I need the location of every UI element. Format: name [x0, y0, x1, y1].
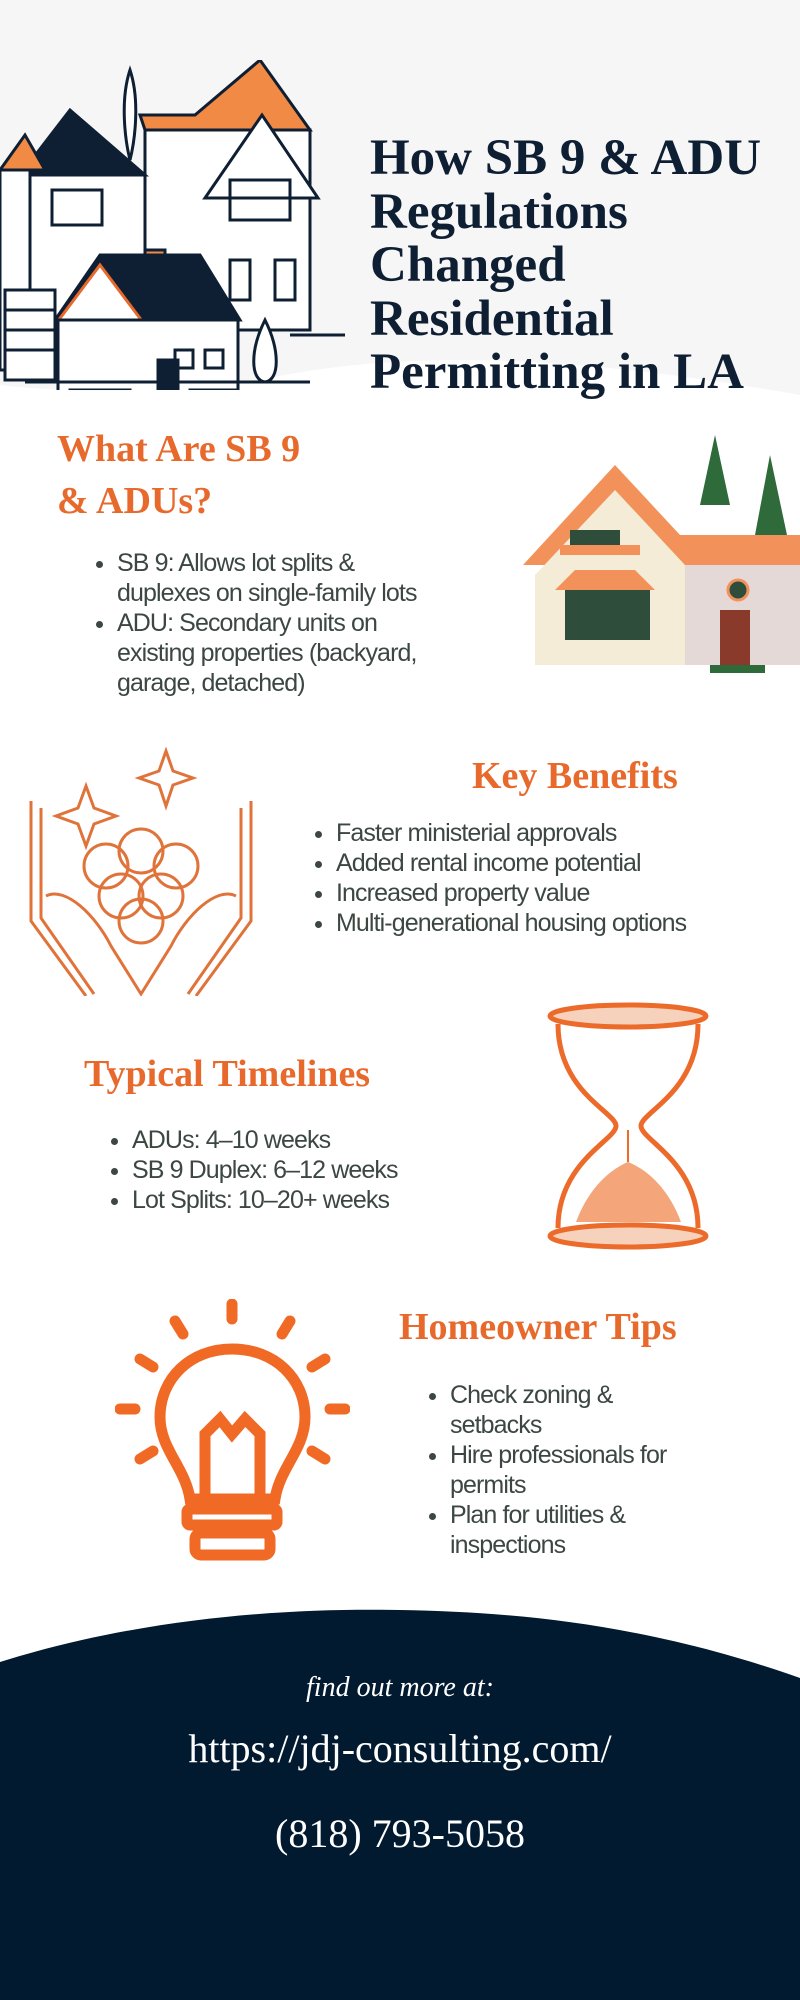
- text: website url: https://jdj-consulting.com/: [188, 1726, 612, 1771]
- title: Permitting in LA: [370, 344, 744, 400]
- bullet list: definitions: SB 9: Allows lot splits &: [117, 549, 354, 577]
- panel: typical timelines: [84, 1053, 398, 1214]
- icon: hands holding: [30, 746, 252, 996]
- heading: Homeowner Tips: Homeowner Tips: [399, 1306, 677, 1348]
- bullet list: benefits: Multi-generational housing options: [336, 909, 686, 937]
- bullet list: timelines: SB 9 Duplex: 6–12 weeks: [132, 1156, 398, 1184]
- icon: hourglass: [548, 1002, 708, 1250]
- bullet list: tips: Check zoning &: [450, 1381, 612, 1409]
- heading: What Are SB 9 & ADUs?: What Are SB 9: [57, 428, 300, 470]
- bullet list: definitions: duplexes on single-family lots: [117, 579, 417, 607]
- bullet list: tips: Hire professionals for: [450, 1441, 666, 1469]
- title: [370, 130, 761, 400]
- bullet list: tips: [429, 1381, 667, 1559]
- bullet list: benefits: [315, 819, 686, 937]
- bullet list: benefits: Faster ministerial approvals: [336, 819, 616, 847]
- panel: key benefits: [315, 755, 686, 937]
- heading: Key Benefits: Key Benefits: [472, 755, 678, 797]
- text: find out more at: find out more at:: [306, 1672, 494, 1703]
- heading: What Are SB 9 & ADUs?: & ADUs?: [57, 480, 212, 522]
- bullet list: tips: setbacks: [450, 1411, 541, 1439]
- bullet list: definitions: ADU: Secondary units on: [117, 609, 377, 637]
- title: Residential: [370, 290, 614, 346]
- icon: light bulb: [115, 1299, 350, 1560]
- heading: What Are SB 9 & ADUs?: [57, 428, 300, 522]
- panel: what are SB 9 & ADUs: [57, 428, 417, 697]
- panel: homeowner tips: [399, 1306, 677, 1559]
- bullet list: benefits: Added rental income potential: [336, 849, 641, 877]
- title: Regulations: [370, 184, 628, 240]
- bullet list: timelines: Lot Splits: 10–20+ weeks: [132, 1186, 389, 1214]
- bullet list: timelines: ADUs: 4–10 weeks: [132, 1126, 330, 1154]
- bullet list: definitions: existing properties (backyard,: [117, 639, 417, 667]
- bullet list: timelines: [111, 1126, 398, 1214]
- bullet list: tips: inspections: [450, 1531, 565, 1559]
- bullet list: tips: Plan for utilities &: [450, 1501, 625, 1529]
- bullet list: benefits: Increased property value: [336, 879, 590, 907]
- heading: Typical Timelines: Typical Timelines: [84, 1053, 370, 1095]
- icon: painted house: [523, 435, 800, 673]
- background: top gray band: [0, 0, 800, 395]
- footer: navy contact panel: [0, 1610, 800, 2000]
- text: phone number: (818) 793-5058: [275, 1811, 525, 1856]
- illustration: houses: [0, 60, 345, 390]
- title: How SB 9 & ADU: [370, 130, 761, 186]
- bullet list: definitions: garage, detached): [117, 669, 305, 697]
- title: Changed: [370, 237, 566, 293]
- bullet list: tips: permits: [450, 1471, 526, 1499]
- bullet list: definitions: [96, 549, 417, 697]
